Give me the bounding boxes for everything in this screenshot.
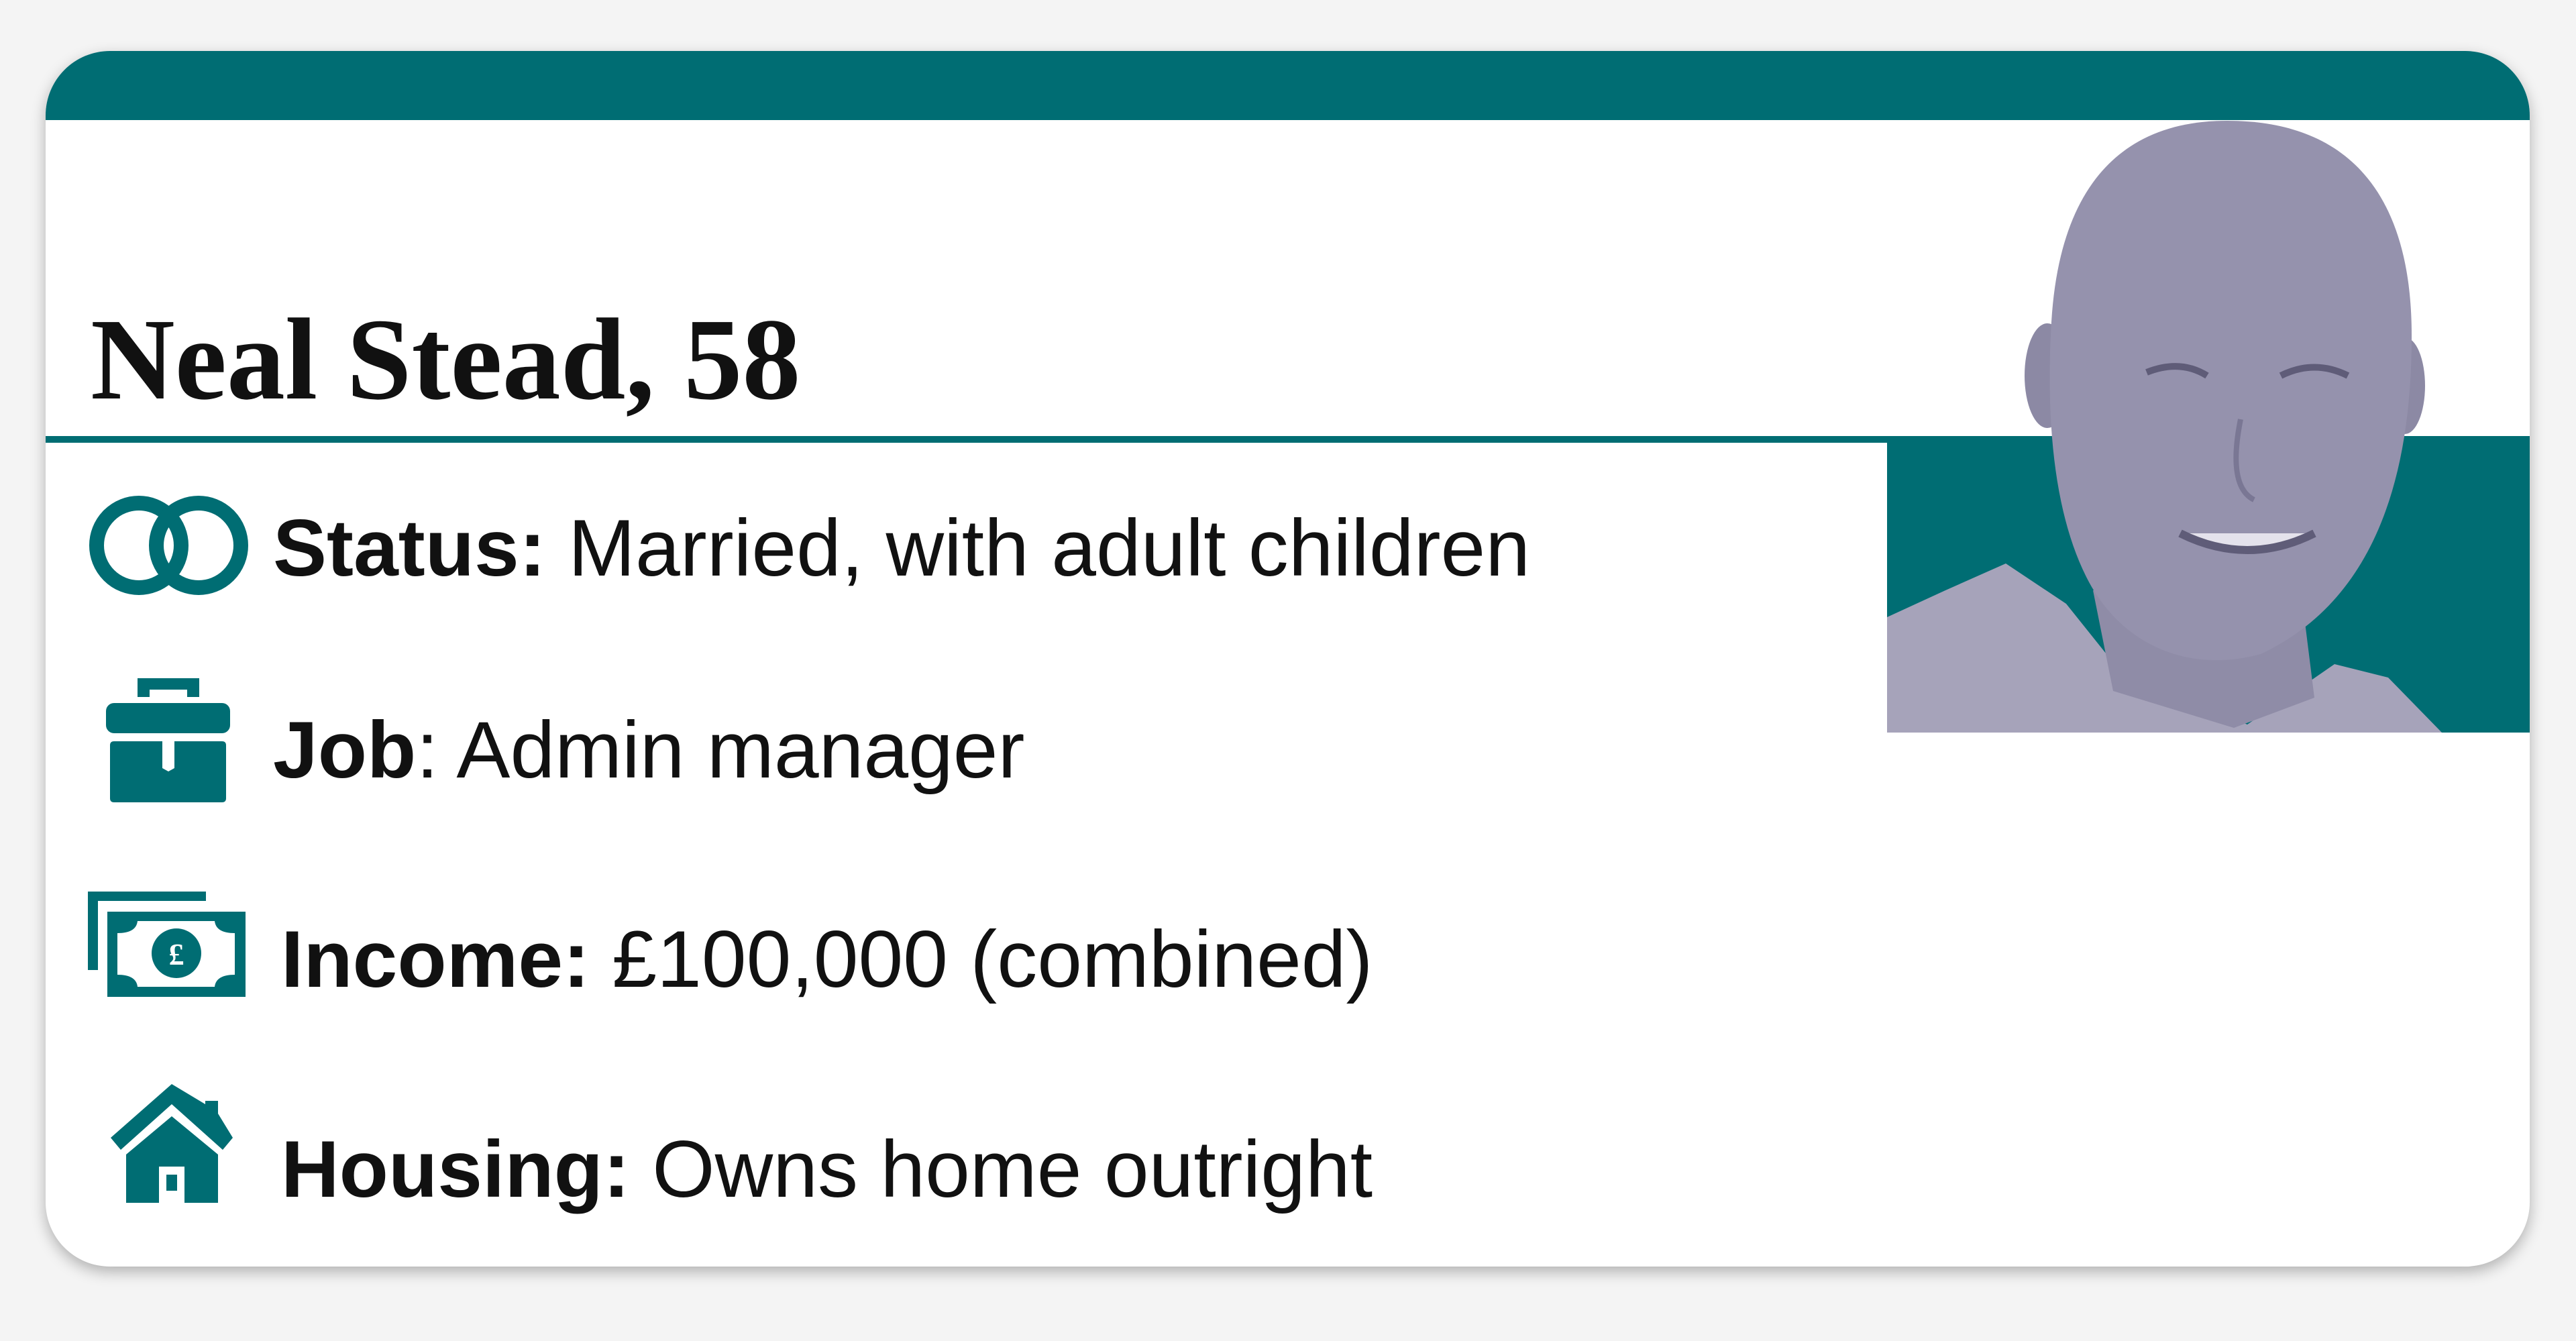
icon: house [111, 1084, 233, 1203]
icons [88, 496, 248, 1203]
photo teal block [1887, 436, 2530, 733]
ears [2025, 323, 2070, 428]
title underline [46, 436, 1887, 443]
row: job: Job: Admin manager [273, 705, 1025, 795]
portrait photo [1887, 121, 2442, 733]
title: Neal Stead, 58 [91, 294, 800, 424]
row: income: Income: £100,000 (combined) [281, 914, 1373, 1004]
icon: briefcase [106, 678, 230, 802]
icon: rings [97, 503, 241, 588]
top teal band [46, 51, 2530, 120]
icon: money: £ [169, 937, 184, 971]
eyes and smile [2147, 366, 2207, 376]
row: housing: Housing: Owns home outright [281, 1124, 1373, 1214]
icon: money [88, 892, 246, 997]
row: status: Status: Married, with adult children [273, 503, 1530, 593]
head [2050, 121, 2412, 660]
shirt [1887, 564, 2442, 733]
neck [2093, 590, 2314, 728]
